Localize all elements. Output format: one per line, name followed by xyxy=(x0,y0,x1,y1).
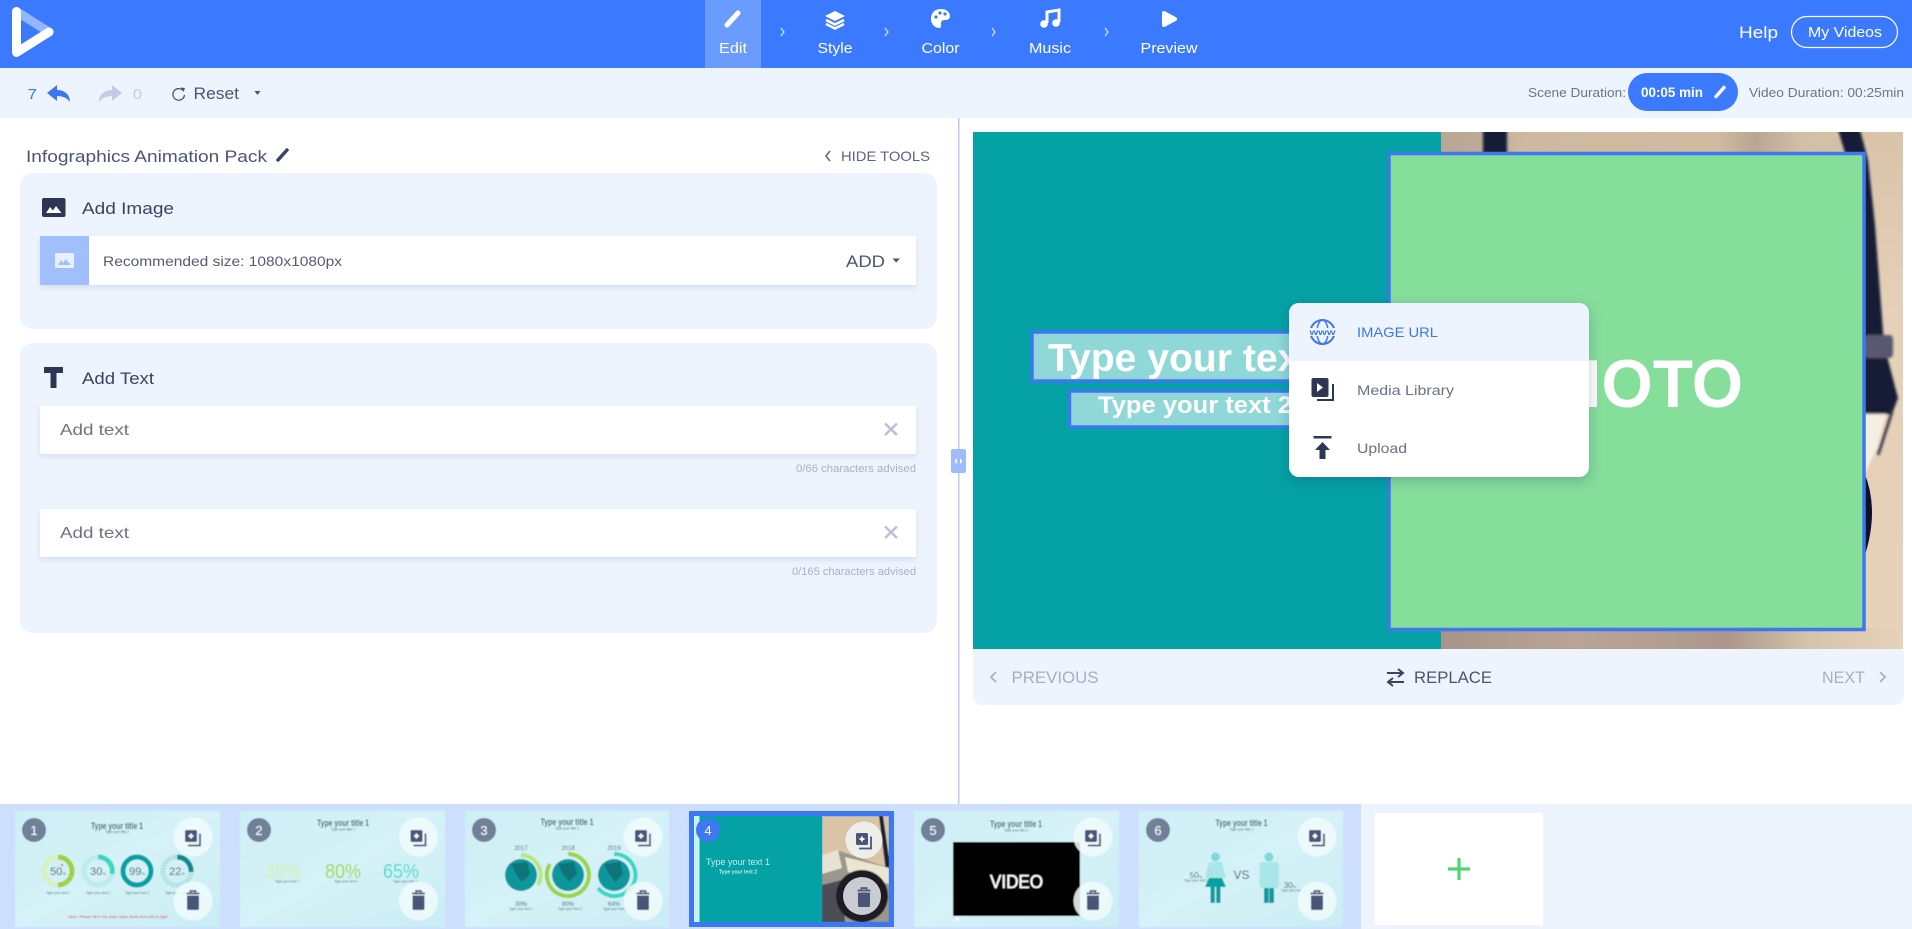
thumbnail 6: 50% xyxy=(1190,871,1203,880)
thumbnail 4 (selected): Type your text 2 xyxy=(719,870,757,876)
nav: edit step xyxy=(705,0,761,68)
image source menu xyxy=(1289,303,1589,477)
heading: add text: Add Text xyxy=(82,369,154,388)
thumbnail 5 xyxy=(914,811,1119,927)
scene strip xyxy=(0,804,1912,929)
heading: add image: Add Image xyxy=(82,199,174,218)
reset button xyxy=(194,84,260,103)
thumbnail 1: Type your text 2 xyxy=(86,891,110,895)
my videos button xyxy=(1792,16,1898,48)
character hint 1: 0/66 characters advised xyxy=(796,463,916,475)
thumbnail 2: Type your text 3 xyxy=(393,880,417,884)
thumbnail 3: 2018 xyxy=(561,846,575,852)
hide tools link: HIDE TOOLS xyxy=(841,148,930,164)
thumbnail 3: 2019 xyxy=(607,846,621,852)
icon: male figure xyxy=(1260,852,1279,903)
redo count: 0 xyxy=(133,86,142,103)
thumbnail 6 xyxy=(1139,811,1343,927)
nav: music step: Music xyxy=(1029,40,1072,57)
thumbnail 3: Type your text 1 xyxy=(509,907,533,911)
nav: style step xyxy=(818,11,852,57)
photo placeholder: PHOTO xyxy=(1510,346,1743,422)
title text box: Type your text 1 xyxy=(1048,337,1345,380)
character hint 2: 0/165 characters advised xyxy=(792,566,916,578)
thumbnail 3: 64% xyxy=(608,902,621,908)
thumbnail 1: 22% xyxy=(169,866,185,878)
menu item: media library: Media Library xyxy=(1357,382,1454,398)
thumbnail 2: 65% xyxy=(383,861,419,883)
icon: globe: www xyxy=(1308,328,1337,337)
thumbnail 6: Type your text 1 xyxy=(1184,878,1208,882)
toolbar xyxy=(0,68,1912,118)
thumbnail 1 xyxy=(15,811,220,927)
video duration label: Video Duration: 00:25min xyxy=(1749,85,1904,100)
thumbnail 5: VIDEO xyxy=(990,872,1043,892)
previous button: PREVIOUS xyxy=(1012,668,1098,687)
thumbnail 3: Type your text 3 xyxy=(603,907,627,911)
thumbnail 1: 99% xyxy=(129,866,145,878)
thumbnail 6: Type your title 1 xyxy=(1216,818,1268,828)
thumbnail 4 (selected) xyxy=(689,811,894,927)
nav: edit step: Edit xyxy=(719,40,748,57)
thumbnail 3: Type your title 2 xyxy=(555,826,579,830)
teal background xyxy=(973,132,1441,649)
thumbnail 1: Type your text 4 xyxy=(165,891,189,895)
scene duration pill: 00:05 min xyxy=(1641,85,1703,100)
nav: preview step: Preview xyxy=(1140,40,1198,57)
icon: redo xyxy=(99,85,122,102)
thumbnail 1: 50% xyxy=(50,866,66,878)
nav: color step xyxy=(922,9,960,57)
project title: Infographics Animation Pack xyxy=(26,147,268,166)
next button: NEXT xyxy=(1822,668,1865,687)
thumbnail 1: Note: Please fill in the chart value fields from left to right xyxy=(69,914,168,919)
scene duration label: Scene Duration: xyxy=(1528,85,1626,100)
thumbnail 6: 6 xyxy=(1154,823,1162,838)
replace button: REPLACE xyxy=(1414,668,1492,687)
panel: add text xyxy=(20,343,937,633)
scene duration pill xyxy=(1628,73,1738,111)
icon: logo xyxy=(16,12,49,52)
icon: image xyxy=(42,198,66,217)
thumbnail 2: 80% xyxy=(325,861,361,883)
thumbnail 5: Type your title 1 xyxy=(990,819,1042,829)
thumbnail 3: Type your text 2 xyxy=(558,907,582,911)
thumbnail 2: Type your title 2 xyxy=(331,828,355,832)
icon: female figure xyxy=(1205,852,1226,903)
background photo xyxy=(1441,130,1903,649)
nav chevrons xyxy=(781,28,1108,36)
thumbnail 4 (selected): 4 xyxy=(704,823,712,838)
header bar xyxy=(0,0,1912,68)
image input row: ADD xyxy=(846,252,885,271)
thumbnail 2 xyxy=(240,811,445,927)
nav: preview step xyxy=(1140,13,1198,57)
thumbnail 3 xyxy=(465,811,669,927)
thumbnail 1: Type your text 1 xyxy=(46,891,70,895)
nav: color step: Color xyxy=(922,40,960,57)
resize handle xyxy=(951,449,966,473)
icon: globe xyxy=(1308,320,1337,344)
text input 2 xyxy=(40,509,916,557)
thumbnail 2: Type your title 1 xyxy=(317,818,369,828)
thumbnail 3: 3 xyxy=(480,823,488,838)
thumbnail 6: Type your text 2 xyxy=(1281,888,1305,892)
nav: style step: Style xyxy=(818,40,852,57)
thumbnail 6: VS xyxy=(1233,868,1250,882)
text input 1: Add text xyxy=(60,422,130,439)
subtitle text box xyxy=(1070,391,1322,427)
thumbnail 2: 30% xyxy=(265,861,301,883)
photo placeholder xyxy=(1389,154,1864,630)
scene navigation bar xyxy=(973,649,1904,705)
thumbnail 3: Type your title 1 xyxy=(540,817,594,827)
panel: add image xyxy=(20,173,937,329)
thumbnail 1: Type your text 3 xyxy=(125,891,149,895)
image input row xyxy=(40,236,916,285)
subtitle text box: Type your text 2 xyxy=(1098,392,1292,419)
icon: reset xyxy=(173,88,185,100)
image input row: Recommended size: 1080x1080px xyxy=(103,253,342,269)
camera photo xyxy=(822,816,889,922)
add scene button xyxy=(1375,813,1543,925)
nav: music step xyxy=(1029,10,1072,57)
thumbnail 3: 30% xyxy=(515,902,528,908)
menu item: image url: IMAGE URL xyxy=(1357,324,1438,340)
scene canvas xyxy=(973,130,1903,649)
thumbnail 3: 2017 xyxy=(514,846,528,852)
thumbnail 1: 30% xyxy=(90,866,106,878)
text input 1 xyxy=(40,406,916,454)
icon: upload xyxy=(1314,436,1332,459)
reset button: Reset xyxy=(194,84,239,103)
thumbnail 2: 2 xyxy=(255,823,263,838)
vertical divider xyxy=(958,118,960,804)
thumbnail 6: Type your title 2 xyxy=(1230,828,1254,832)
my videos button: My Videos xyxy=(1808,24,1882,41)
icon: media library xyxy=(1312,378,1333,400)
undo count: 7 xyxy=(28,86,37,103)
help link: Help xyxy=(1739,23,1778,42)
thumbnail 3: 80% xyxy=(562,902,575,908)
thumbnail 6: 30% xyxy=(1284,881,1297,890)
icon: text xyxy=(44,367,63,388)
thumbnail 5: Type your title 2 xyxy=(1004,828,1028,832)
thumbnail 1: Type your title 1 xyxy=(91,821,143,831)
menu item: upload: Upload xyxy=(1357,440,1407,456)
thumbnail 4 (selected): Type your text 1 xyxy=(706,857,770,868)
thumbnail 1: 1 xyxy=(30,823,38,838)
icon: undo xyxy=(47,85,70,102)
thumbnail 5: 5 xyxy=(929,823,937,838)
text input 2: Add text xyxy=(60,525,130,542)
thumbnail 1: Type your title 2 xyxy=(105,830,129,834)
thumbnail 2: Type your text 1 xyxy=(275,880,299,884)
thumbnail 2: Type your text 2 xyxy=(334,880,358,884)
